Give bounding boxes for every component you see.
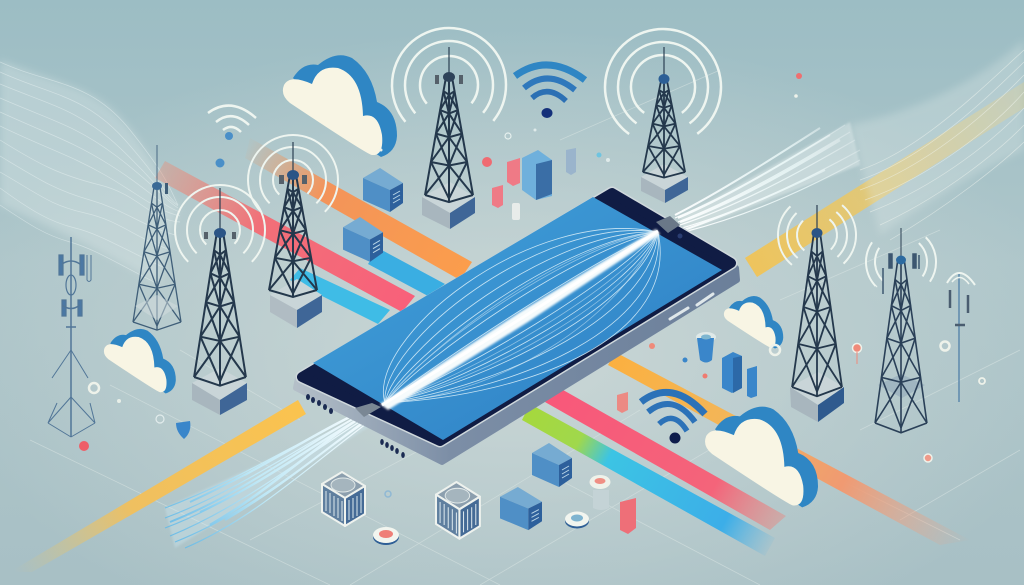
- ribbon: pink lower right: [545, 386, 786, 530]
- tower: upper left with rings: [229, 116, 357, 328]
- phone: [296, 192, 737, 462]
- tower: far right with arcs: [852, 213, 950, 433]
- server box: bottom left: [500, 487, 542, 530]
- mast tower right: [947, 273, 975, 402]
- phone screen: [313, 197, 722, 440]
- server cube: right: [436, 482, 480, 539]
- central white beam: [380, 229, 660, 410]
- wifi icon: lower: [641, 392, 705, 444]
- tower: far left: [133, 145, 181, 330]
- wispy mesh left: [0, 62, 180, 285]
- small cylinders right: [649, 332, 757, 398]
- server box: bottom right: [532, 443, 572, 487]
- side buttons: [670, 294, 713, 319]
- small parts cluster: top: [482, 133, 602, 220]
- bottom strip: [355, 403, 381, 417]
- tower: left middle with rings: [156, 166, 284, 415]
- signal beam upper right: [675, 122, 860, 232]
- wispy light band left: [0, 60, 180, 285]
- fiber lines on screen: [383, 228, 660, 403]
- ribbon: orange upper left: [245, 138, 472, 280]
- wifi icon: small white left: [208, 106, 256, 140]
- ribbon: yellow lower left: [10, 400, 306, 572]
- server box: upper: [363, 168, 403, 212]
- cloud: right small: [724, 296, 783, 348]
- cloud: left: [104, 329, 176, 393]
- ribbon: blue below orange: [368, 248, 445, 296]
- ribbon: yellow upper right: [745, 82, 1024, 277]
- cloud: right large: [705, 407, 818, 507]
- server box: middle: [343, 217, 383, 262]
- small parts bottom: [373, 475, 636, 545]
- mast tower left: [48, 237, 95, 437]
- ribbon: pink upper left: [155, 161, 415, 312]
- wispy light band right: [850, 40, 1024, 235]
- tower: right with arcs: [762, 180, 872, 422]
- speaker holes: [306, 394, 405, 458]
- server cube: left: [322, 472, 365, 526]
- wispy mesh right: [860, 50, 1024, 240]
- ribbon: cyan upper left: [290, 268, 390, 324]
- signal beam lower left: [165, 407, 380, 548]
- small pink block: [617, 392, 628, 413]
- ribbon: orange lower right: [608, 352, 970, 545]
- camera strip and dot: [656, 216, 680, 233]
- wifi icon: top: [515, 65, 585, 118]
- small decorations: [79, 73, 985, 462]
- tower: top right with rings: [582, 6, 744, 203]
- ribbon: green to cyan lower right: [522, 404, 775, 556]
- tower: top center with rings: [369, 5, 529, 229]
- cloud: top: [283, 55, 397, 157]
